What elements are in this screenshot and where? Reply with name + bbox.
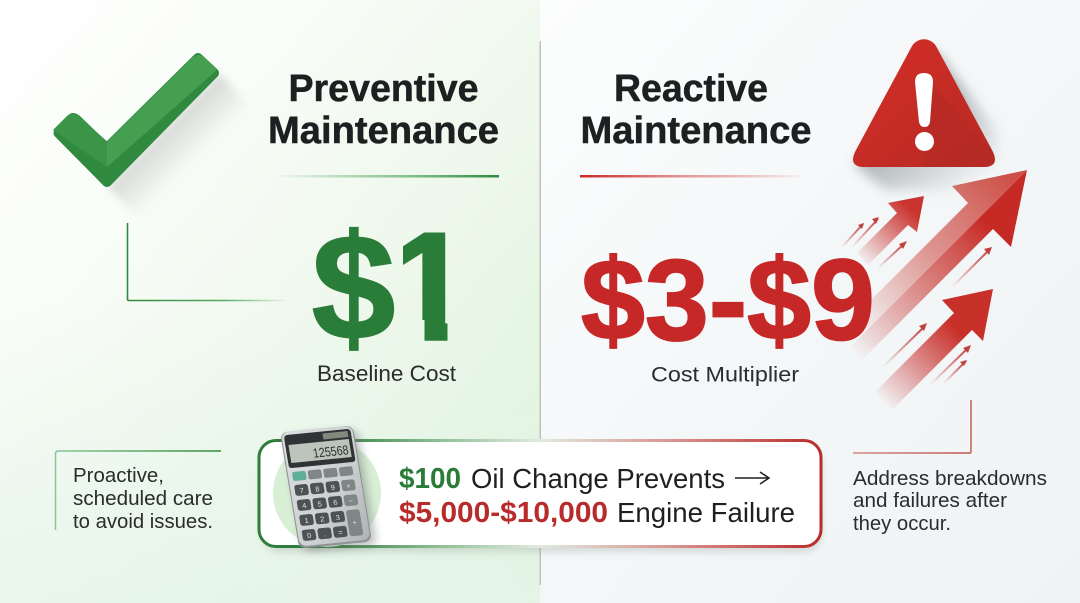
icon: calculator bbox=[280, 425, 377, 553]
heading: preventive maintenance: Maintenance bbox=[268, 110, 499, 152]
screen bezel bbox=[284, 429, 356, 468]
text: preventive description bbox=[73, 465, 213, 533]
keypad: 6 bbox=[333, 498, 338, 507]
icon: green check mark bbox=[53, 55, 262, 228]
keypad: 0 bbox=[306, 531, 312, 540]
keypad: 3 bbox=[335, 513, 341, 522]
keypad: 9 bbox=[330, 483, 336, 492]
callout text: $5,000-$10,000 bbox=[399, 497, 608, 529]
caption: baseline cost: Baseline Cost bbox=[317, 361, 457, 386]
connector: reactive description bbox=[853, 400, 971, 453]
caption: cost multiplier: Cost Multiplier bbox=[651, 362, 799, 386]
heading underline: green bbox=[272, 175, 499, 178]
callout text bbox=[399, 463, 795, 529]
heading: reactive maintenance: Reactive bbox=[614, 68, 768, 110]
mid arrow bbox=[857, 196, 924, 265]
center divider bbox=[540, 41, 541, 585]
keypad: 4 bbox=[301, 501, 307, 510]
icon: calculator: 125568 bbox=[312, 443, 350, 461]
callout text: $100 bbox=[399, 463, 461, 495]
arrows: rising costs bbox=[825, 170, 1027, 410]
bracket connector: baseline cost bbox=[128, 223, 290, 300]
keypad bbox=[292, 466, 364, 541]
heading: preventive maintenance bbox=[268, 68, 499, 152]
mini arrows bbox=[842, 219, 990, 385]
text: preventive description: to avoid issues. bbox=[73, 511, 213, 533]
text: reactive description: Address breakdowns bbox=[853, 468, 1047, 490]
keypad: 8 bbox=[315, 484, 320, 494]
big arrow bbox=[825, 170, 1027, 365]
keypad: × bbox=[346, 481, 351, 490]
background: reactive side bbox=[540, 0, 1080, 603]
text: reactive description: and failures after bbox=[853, 490, 1007, 512]
keypad: 1 bbox=[304, 516, 309, 525]
text: preventive description: scheduled care bbox=[73, 488, 213, 510]
big number: $1: $ bbox=[312, 203, 396, 371]
callout text: Oil Change Prevents bbox=[471, 463, 725, 494]
keypad: . bbox=[323, 529, 326, 538]
display bbox=[288, 439, 352, 463]
callout text: Engine Failure bbox=[617, 497, 795, 528]
low arrow bbox=[875, 289, 993, 410]
background: preventive side bbox=[0, 0, 540, 603]
keypad: − bbox=[348, 496, 354, 505]
icon: warning triangle bbox=[853, 39, 1000, 190]
keypad: 7 bbox=[299, 486, 304, 495]
big number: $1: 1 bbox=[387, 200, 473, 373]
keypad: 2 bbox=[320, 514, 325, 524]
keypad: 5 bbox=[317, 499, 323, 509]
big number: $1 bbox=[312, 226, 448, 351]
text: preventive description: Proactive, bbox=[73, 465, 164, 487]
calculator backdrop circle bbox=[273, 439, 381, 547]
text: reactive description bbox=[853, 468, 1047, 535]
heading underline: red bbox=[580, 175, 806, 178]
heading: preventive maintenance: Preventive bbox=[288, 68, 478, 110]
connector: preventive description bbox=[56, 451, 221, 530]
heading: reactive maintenance bbox=[580, 68, 812, 152]
text: reactive description: they occur. bbox=[853, 513, 951, 535]
heading: reactive maintenance: Maintenance bbox=[580, 110, 812, 152]
keypad: + bbox=[352, 518, 357, 527]
keypad: = bbox=[338, 528, 343, 537]
arrow: prevents bbox=[735, 472, 769, 484]
big number: $3-$9: $3-$9 bbox=[581, 236, 875, 364]
callout card bbox=[259, 439, 822, 552]
